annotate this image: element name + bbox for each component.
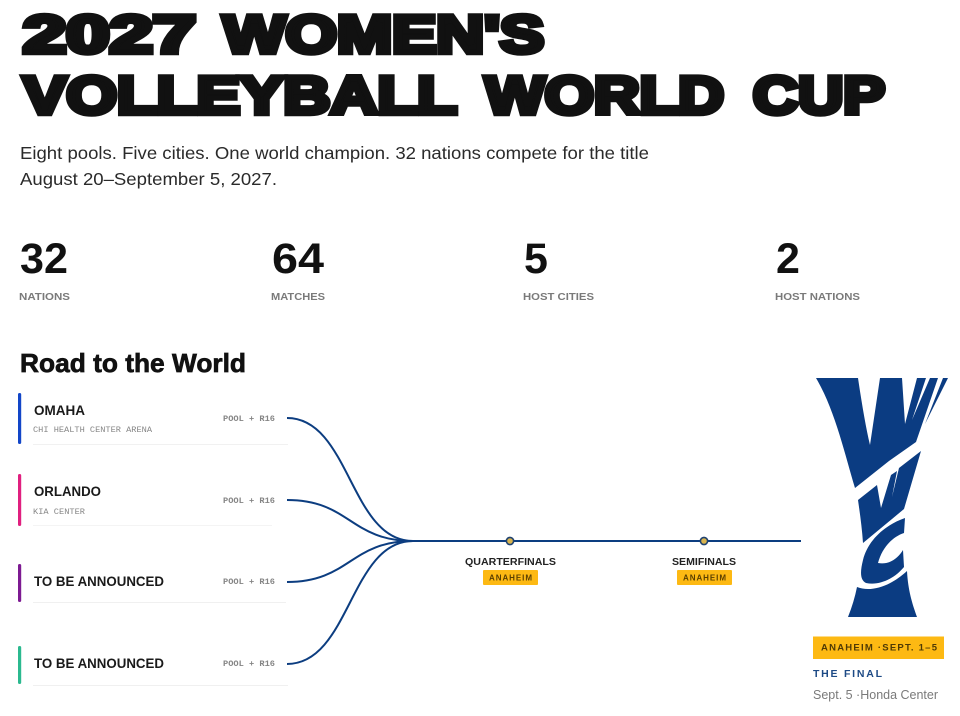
stage: semifinals: SEMIFINALS [672, 556, 736, 568]
subtitle [20, 143, 649, 189]
card: Orlando: ORLANDO [34, 483, 101, 499]
card: to be announced (green) [18, 646, 288, 686]
stat: nations: NATIONS [19, 291, 70, 303]
stat: nations [19, 235, 70, 303]
card: to be announced (green): TO BE ANNOUNCED [34, 655, 164, 671]
title: WORLD [485, 66, 724, 126]
title [23, 6, 885, 126]
stage: semifinals [672, 537, 736, 585]
card: to be announced (purple): TO BE ANNOUNCED [34, 573, 164, 589]
stat: host nations [775, 235, 860, 303]
stat: host nations: 2 [776, 235, 800, 283]
stage: quarterfinals: ANAHEIM [489, 574, 532, 582]
stat: host cities [523, 235, 594, 303]
final date and venue: Sept. 5 ·Honda Center [813, 687, 939, 702]
card: to be announced (purple): POOL + R16 [223, 578, 275, 587]
section heading: Road to the World [20, 348, 246, 378]
title: VOLLEYBALL [23, 66, 457, 126]
stat: matches [271, 235, 325, 303]
stage: quarterfinals: QUARTERFINALS [465, 556, 556, 568]
the final label: THE FINAL [813, 668, 883, 680]
stat: matches: MATCHES [271, 291, 325, 303]
stat: matches: 64 [272, 235, 324, 283]
subtitle: August 20–September 5, 2027. [20, 169, 277, 189]
card: Orlando: POOL + R16 [223, 497, 275, 506]
stage: semifinals: ANAHEIM [683, 574, 726, 582]
card: Omaha: OMAHA [34, 402, 85, 418]
card: to be announced (green): POOL + R16 [223, 660, 275, 669]
title: WOMEN'S [223, 6, 544, 64]
title: 2027 [23, 6, 196, 64]
card: Omaha [18, 393, 288, 444]
card: Orlando [18, 474, 275, 526]
stat: host nations: HOST NATIONS [775, 291, 860, 303]
final badge [813, 636, 944, 659]
card: to be announced (purple) [18, 564, 286, 602]
stat: host cities: 5 [524, 235, 548, 283]
card: Omaha: POOL + R16 [223, 415, 275, 424]
icon: WWC trophy logo [816, 378, 948, 617]
bracket connector lines [287, 418, 801, 664]
card: Omaha: CHI HEALTH CENTER ARENA [33, 426, 152, 435]
subtitle: Eight pools. Five cities. One world champion. 32 nations compete for the title [20, 143, 649, 163]
final badge: ANAHEIM ·SEPT. 1–5 [821, 642, 938, 654]
stat: host cities: HOST CITIES [523, 291, 594, 303]
title: CUP [753, 66, 885, 126]
stat: nations: 32 [20, 235, 68, 283]
stage: quarterfinals [465, 537, 556, 585]
card: Orlando: KIA CENTER [33, 508, 85, 517]
